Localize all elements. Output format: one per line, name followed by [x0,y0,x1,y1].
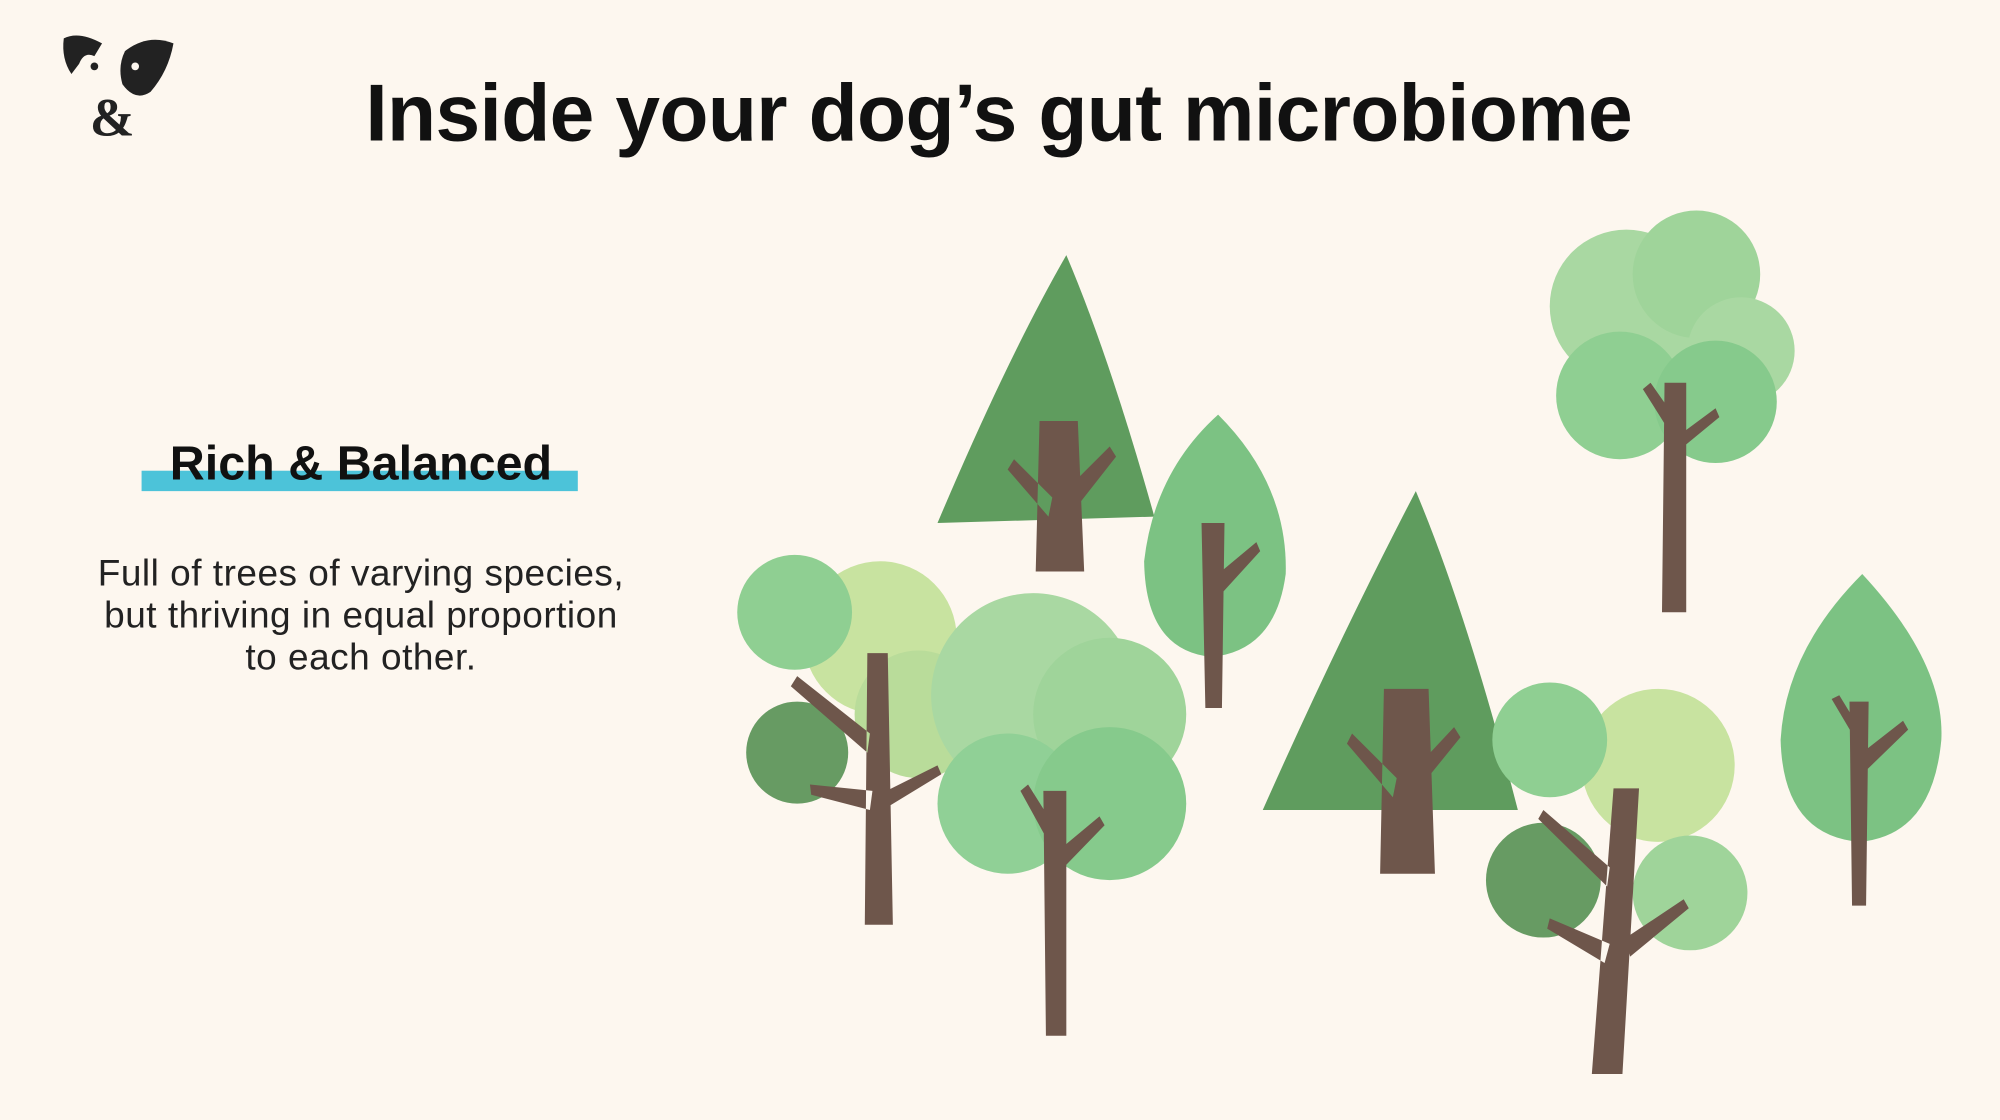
tree: leaf right [1781,574,1941,906]
body text: to each other. [245,637,477,678]
body text: but thriving in equal proportion [104,595,618,636]
body text: Full of trees of varying species, [98,553,624,594]
tree: multi right [1486,682,1747,1074]
logo: dog face with ampersand [63,35,173,147]
tree: pine middle [1263,491,1518,874]
tree: round top right [1550,211,1795,612]
heading: Rich & Balanced: Rich & Balanced [170,437,552,491]
title: Inside your dog’s gut microbiome [365,68,1632,158]
tree: leaf middle [1144,415,1286,708]
tree: round front [931,593,1186,1036]
logo: dog face with ampersand: & [90,87,135,147]
tree: pine top [938,255,1154,571]
tree: multi left [737,555,982,925]
